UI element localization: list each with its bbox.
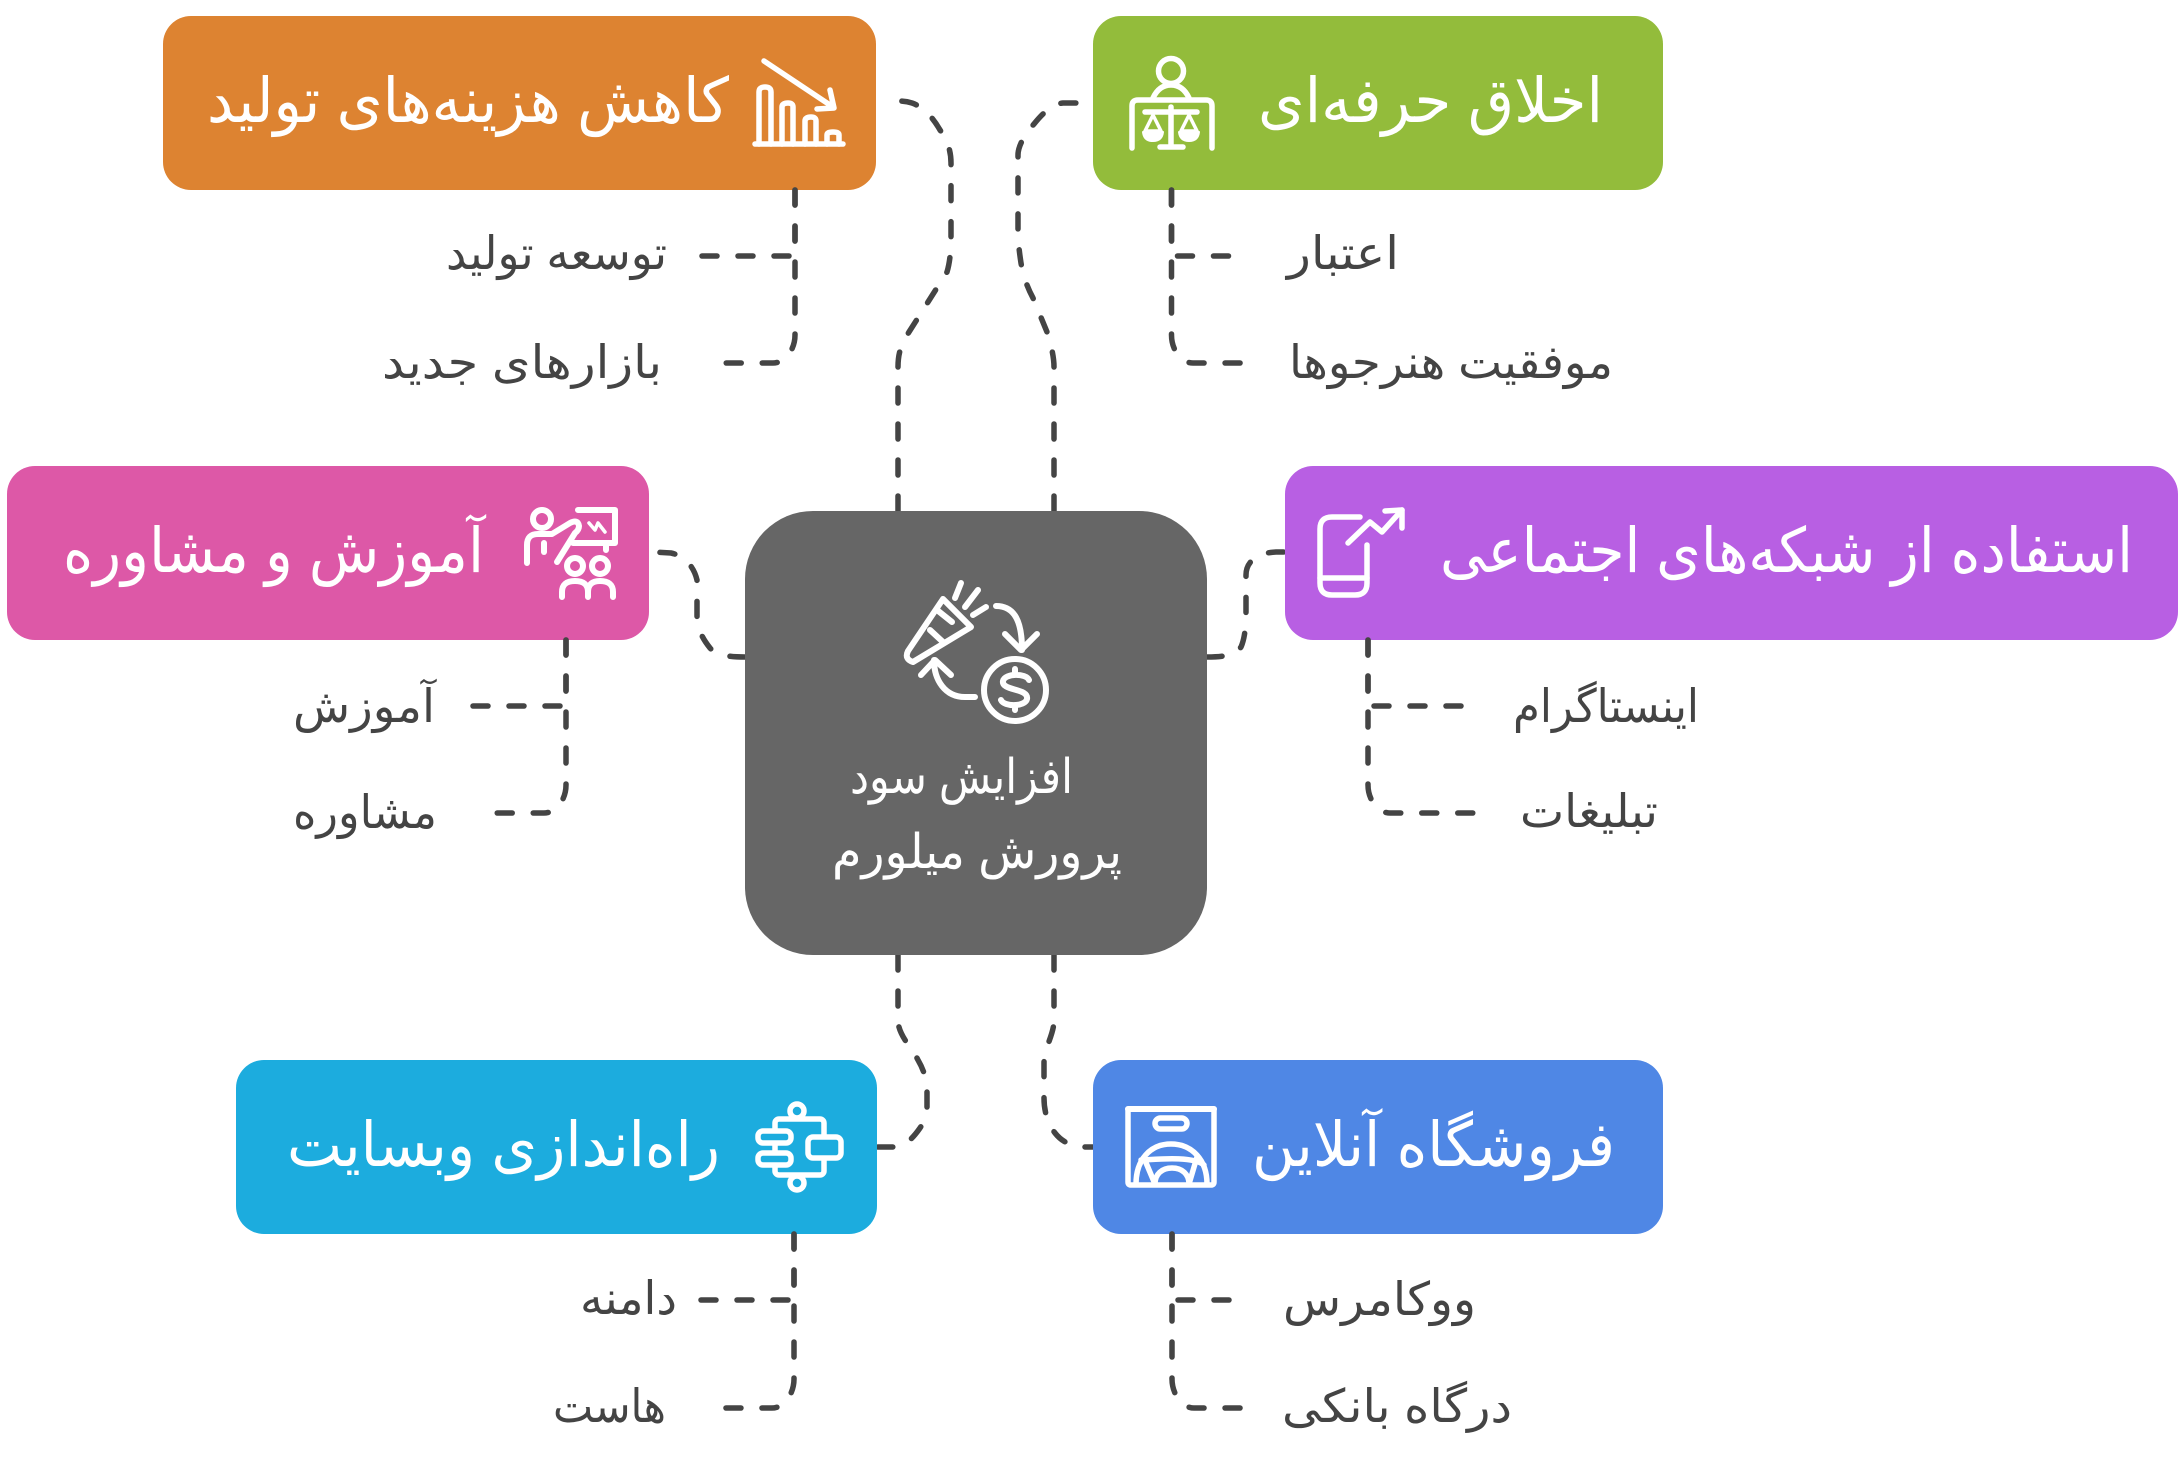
icon: carrot and money cycle xyxy=(907,583,1046,721)
branches: orange sub-items xyxy=(697,190,795,363)
sub-item: موفقیت هنرجوها xyxy=(1289,336,1613,390)
branches: pink sub-items xyxy=(469,640,566,813)
sub-item: اعتبار xyxy=(1285,227,1399,280)
branches: blue sub-items xyxy=(1172,1234,1250,1408)
icon: phone with rising arrow xyxy=(1320,510,1402,595)
heading: اخلاق حرفه‌ای xyxy=(1258,67,1603,137)
panel: online store xyxy=(1093,1060,1663,1234)
central title line 1: افزایش سود xyxy=(850,751,1073,805)
heading: فروشگاه آنلاین xyxy=(1252,1107,1615,1181)
branches: purple sub-items xyxy=(1368,640,1481,813)
sub-item: توسعه تولید xyxy=(446,227,667,281)
panel: using social networks xyxy=(1285,466,2178,640)
connector: center to green panel xyxy=(1018,103,1093,511)
panel: central topic xyxy=(745,511,1207,955)
icon: person with scales xyxy=(1132,58,1212,148)
sub-item: اینستاگرام xyxy=(1513,680,1699,734)
heading: کاهش هزینه‌های تولید xyxy=(207,67,729,137)
sub-item: درگاه بانکی xyxy=(1282,1380,1512,1433)
sub-item: دامنه xyxy=(580,1272,677,1324)
panel: training and consulting xyxy=(7,466,649,640)
panel: reducing production costs xyxy=(163,16,876,190)
sub-item: هاست xyxy=(553,1380,666,1432)
connector: center to cyan panel xyxy=(877,955,927,1147)
heading: راه‌اندازی وبسایت xyxy=(287,1111,720,1181)
sub-item: تبلیغات xyxy=(1520,785,1658,837)
branches: green sub-items xyxy=(1172,190,1249,363)
icon: presenter and audience xyxy=(527,510,615,597)
icon: module blocks xyxy=(758,1104,841,1190)
connector: center to purple panel xyxy=(1207,552,1285,657)
icon: declining bar chart xyxy=(755,61,843,144)
sub-item: بازارهای جدید xyxy=(382,336,662,389)
heading: استفاده از شبکه‌های اجتماعی xyxy=(1440,517,2133,587)
sub-item: آموزش xyxy=(293,679,437,734)
connector: center to blue panel xyxy=(1044,955,1093,1147)
central title line 2: پرورش میلورم xyxy=(832,826,1122,880)
panel: website launch xyxy=(236,1060,877,1234)
panel: professional ethics xyxy=(1093,16,1663,190)
sub-item: مشاوره xyxy=(293,786,437,840)
branches: cyan sub-items xyxy=(697,1234,794,1408)
heading: آموزش و مشاوره xyxy=(63,513,487,587)
connector: center to pink panel xyxy=(652,552,745,657)
sub-item: ووکامرس xyxy=(1283,1273,1476,1327)
icon: store front xyxy=(1128,1109,1214,1185)
connector: center to orange panel xyxy=(896,101,951,511)
